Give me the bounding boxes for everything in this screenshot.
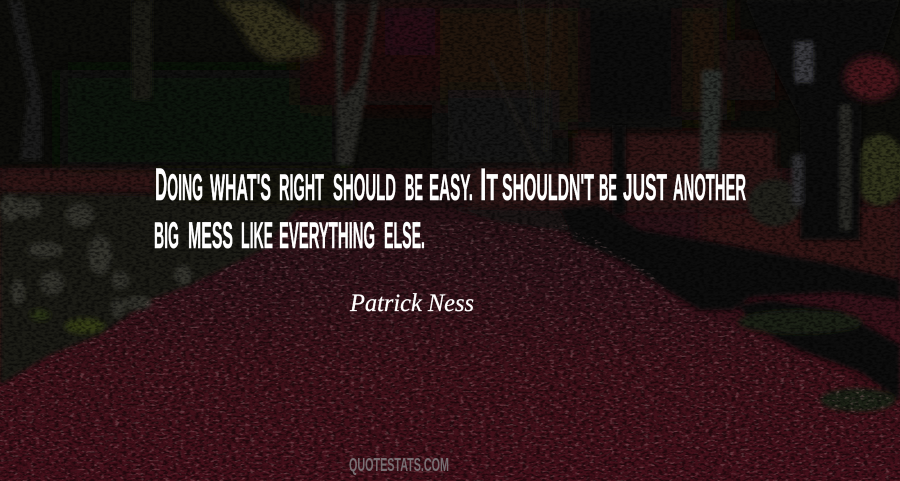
line 1: EASY. [429,167,473,208]
large dark trunk [745,0,900,240]
line 1: SHOULDN'T [502,167,594,208]
red floor bands [0,133,900,280]
line 1: BE [405,167,423,208]
hedge and mounds on the right [450,134,900,412]
line 1: IT [480,159,498,210]
quote text: ELSE. [384,215,425,256]
quote text [154,159,746,256]
dark forest canopy [0,0,900,168]
olive tree patch [215,0,320,62]
line 1: WHAT'S [210,167,271,208]
line 2: MESS [188,215,233,256]
line 2: BIG [154,215,179,256]
line 1: DOING [155,159,203,210]
text: ANOTHER [673,167,746,208]
stone wall [0,193,300,385]
line 1: JUST [623,167,667,208]
pale slender trunks [8,0,42,160]
author name: Patrick Ness [349,290,474,317]
line 2: LIKE [241,215,273,256]
line 1: SHOULD [333,167,396,208]
line 1: BE [599,167,617,208]
line 1 [155,159,746,210]
line 2 [154,215,425,256]
watermark: QUOTESTATS.COM [349,455,449,475]
line 2: EVERYTHING [279,215,375,256]
tree trunks [8,0,900,240]
red foliage on the right [844,56,900,100]
line 1: RIGHT [279,167,324,208]
